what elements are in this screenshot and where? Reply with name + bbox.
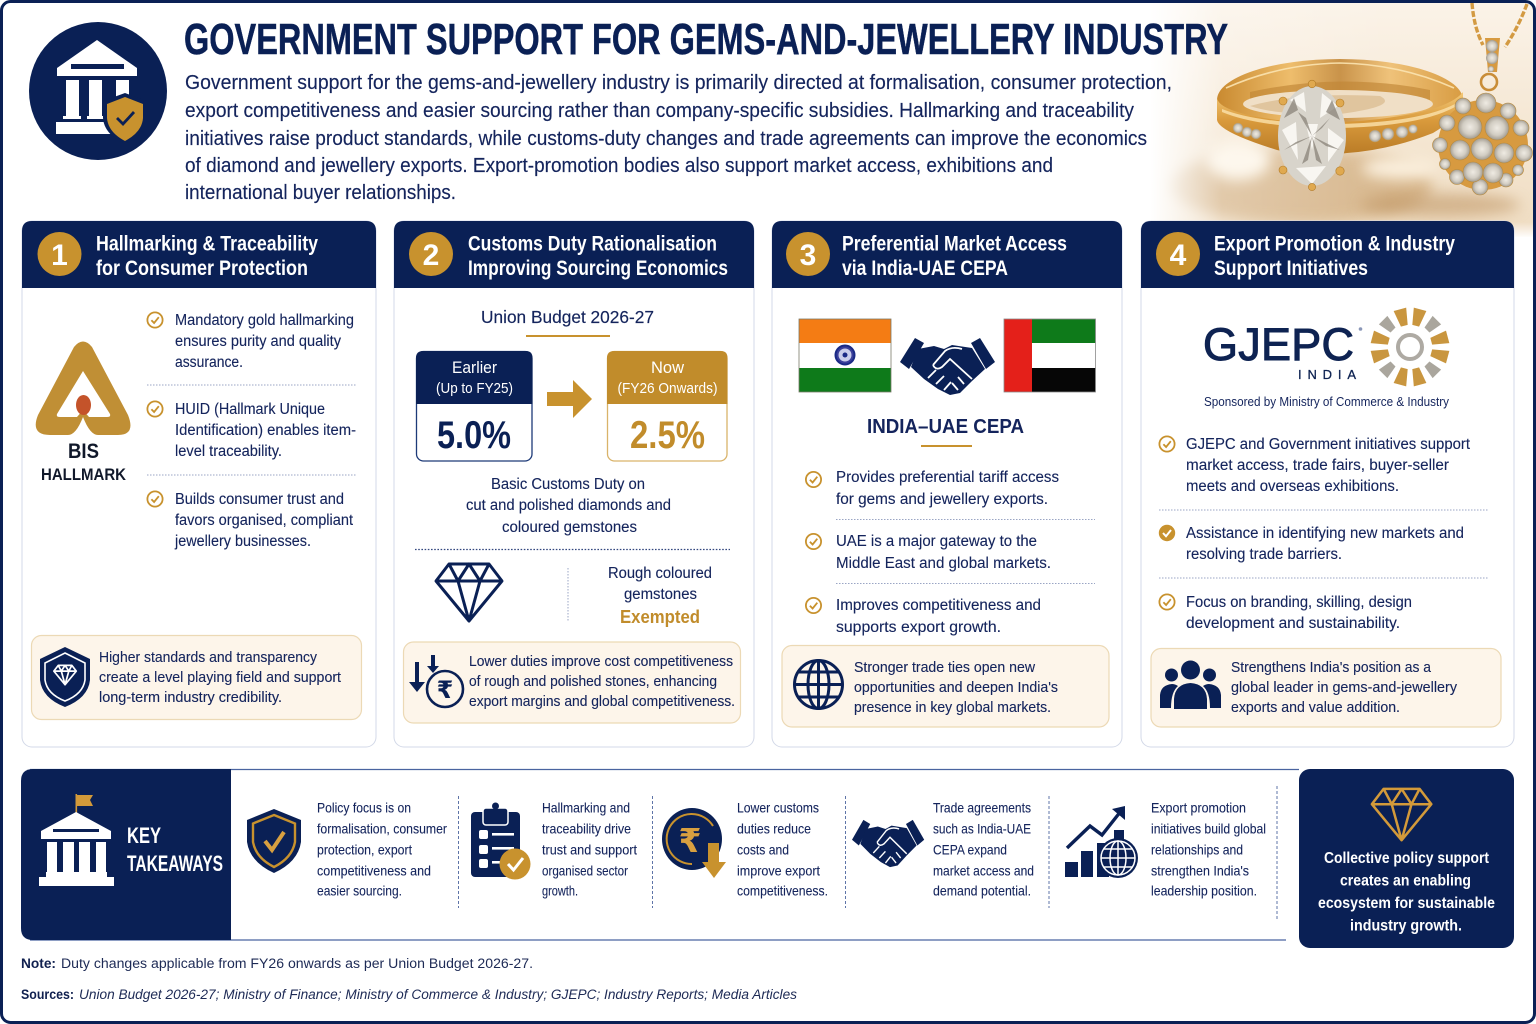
conclusion text	[1318, 850, 1495, 934]
text: rough gemstones exempted	[608, 565, 712, 627]
callout: higher standards: long-term industry credibility.	[99, 690, 282, 706]
intro paragraph: of diamond and jewellery exports. Export-promotion bodies also support market access, exhibitions and	[185, 155, 1053, 177]
bullet: GJEPC initiatives	[1159, 436, 1471, 495]
bullet: HUID: HUID (Hallmark Unique	[175, 401, 325, 418]
takeaway 3: lower customs duties: duties reduce	[737, 820, 811, 836]
takeaway 1: policy focus: formalisation, consumer	[317, 820, 447, 836]
text: basic customs duty: cut and polished diamonds and	[466, 497, 671, 514]
takeaway 4: trade agreements: such as India-UAE	[933, 820, 1031, 836]
text: basic customs duty: coloured gemstones	[502, 519, 637, 536]
arrow: earlier to now	[547, 380, 592, 418]
panel 1 header: Hallmarking & Traceability	[96, 232, 318, 256]
panel 4 header: Export Promotion & Industry	[1214, 232, 1455, 256]
intro paragraph	[185, 72, 1172, 204]
callout: stronger trade ties: opportunities and deepen India's	[854, 680, 1058, 696]
CEPA heading: INDIA–UAE CEPA	[867, 416, 1024, 438]
icon: gold diamond	[1372, 789, 1431, 840]
callout: global leader: global leader in gems-and-jewellery	[1231, 680, 1458, 696]
panel: 3 preferential market access	[772, 221, 1122, 747]
box: current duty 2.5%: 2.5%	[630, 414, 705, 457]
callout: stronger trade ties	[782, 646, 1109, 727]
panel 1 header	[22, 221, 376, 288]
logo: GJEPC India: Sponsored by Ministry of Commerce & Industry	[1204, 395, 1450, 409]
callout: lower duties: Lower duties improve cost competitiveness	[469, 654, 733, 670]
text: basic customs duty: Basic Customs Duty on	[491, 476, 645, 493]
panel 2 header	[394, 221, 754, 288]
takeaway 5: export promotion: Export promotion	[1151, 800, 1246, 816]
box: earlier duty 5.0%: Earlier	[452, 358, 497, 377]
conclusion text: industry growth.	[1350, 918, 1462, 934]
note: Note:	[21, 956, 56, 971]
bullet: mandatory hallmarking: ensures purity and quality	[175, 333, 341, 350]
key takeaways label with building icon: TAKEAWAYS	[127, 851, 223, 876]
bullet: HUID	[147, 401, 356, 460]
takeaway 3: lower customs duties: ₹	[679, 821, 701, 860]
bullet: GJEPC initiatives: market access, trade fairs, buyer-seller	[1186, 457, 1449, 474]
callout: higher standards	[32, 636, 362, 720]
callout: global leader: Strengthens India's position as a	[1231, 660, 1432, 676]
icon: UAE flag	[1004, 319, 1096, 392]
header icon: government building with shield	[29, 22, 167, 160]
panel 4 header: Support Initiatives	[1214, 257, 1368, 280]
bullet: consumer trust: jewellery businesses.	[174, 533, 311, 550]
box: earlier duty 5.0%	[416, 351, 532, 461]
intro paragraph: initiatives raise product standards, while customs-duty changes and trade agreements can improve the economics	[185, 128, 1147, 150]
takeaway 4: trade agreements: CEPA expand	[933, 842, 1007, 858]
takeaway 3: lower customs duties	[662, 800, 828, 898]
callout: stronger trade ties: Stronger trade ties open new	[854, 660, 1036, 676]
bullet: mandatory hallmarking: assurance.	[175, 354, 243, 371]
hero photo: gold ring and diamond pendant	[1150, 3, 1533, 238]
takeaway 3: lower customs duties: competitiveness.	[737, 882, 828, 898]
callout: lower duties: of rough and polished stones, enhancing	[469, 674, 717, 690]
bullet: mandatory hallmarking: Mandatory gold hallmarking	[175, 312, 354, 329]
bullet: UAE gateway: Middle East and global markets.	[836, 555, 1051, 572]
bullet: consumer trust: favors organised, compliant	[175, 512, 354, 529]
text: rough gemstones exempted: Rough coloured	[608, 565, 712, 582]
bullet: tariff access	[806, 469, 1059, 508]
takeaway 4: trade agreements: Trade agreements	[933, 800, 1031, 816]
icon: India flag	[799, 319, 891, 392]
callout: lower duties: export margins and global competitiveness.	[469, 694, 735, 710]
takeaway 1: policy focus	[247, 800, 447, 898]
icon: BIS hallmark logo: HALLMARK	[41, 466, 126, 484]
logo: GJEPC India	[1203, 308, 1450, 409]
panel: 1 hallmarking and traceability	[22, 221, 376, 747]
takeaway 5: export promotion: relationships and	[1151, 842, 1243, 858]
panel 3 header: Preferential Market Access	[842, 232, 1067, 256]
panel 2 header: Improving Sourcing Economics	[468, 257, 728, 280]
panel 4 header	[1141, 221, 1514, 288]
icon: BIS hallmark logo: BIS	[68, 440, 99, 463]
intro paragraph: Government support for the gems-and-jewellery industry is primarily directed at formalisation, consumer protection,	[185, 72, 1172, 94]
panel 2 header: 2	[423, 239, 439, 272]
text: basic customs duty	[466, 476, 671, 536]
bullet: mandatory hallmarking	[147, 312, 354, 371]
icon: diamond	[436, 564, 502, 621]
bullet: new markets: Assistance in identifying new markets and	[1186, 525, 1464, 542]
bullet: GJEPC initiatives: GJEPC and Government initiatives support	[1186, 436, 1471, 453]
takeaway 2: hallmarking trust: Hallmarking and	[542, 800, 630, 816]
takeaway 3: lower customs duties: costs and	[737, 842, 789, 858]
takeaway 4: trade agreements: demand potential.	[933, 882, 1031, 898]
bullet: branding and skilling: Focus on branding, skilling, design	[1186, 594, 1412, 611]
text: rough gemstones exempted: Exempted	[620, 607, 700, 627]
icon: handshake	[900, 338, 995, 395]
bullet: consumer trust	[147, 491, 354, 550]
takeaway 1: policy focus: protection, export	[317, 842, 412, 858]
text: rough gemstones exempted: gemstones	[624, 586, 697, 603]
bullet: tariff access: for gems and jewellery exports.	[836, 491, 1048, 508]
bullet: consumer trust: Builds consumer trust and	[175, 491, 344, 508]
sources: Union Budget 2026-27; Ministry of Finance; Ministry of Commerce & Industry; GJEPC; Industry Reports; Media Articles	[79, 987, 797, 1002]
panel: 2 customs duty rationalisation	[394, 221, 754, 747]
panel: 4 export promotion	[1141, 221, 1514, 747]
bullet: competitiveness: supports export growth.	[836, 619, 1001, 636]
box: current duty 2.5%	[607, 351, 728, 461]
takeaway 5: export promotion: strengthen India's	[1151, 862, 1249, 878]
intro paragraph: international buyer relationships.	[185, 182, 456, 204]
bullet: UAE gateway: UAE is a major gateway to the	[836, 533, 1037, 550]
takeaway 2: hallmarking trust: traceability drive	[542, 820, 631, 836]
bullet: tariff access: Provides preferential tariff access	[836, 469, 1059, 486]
panel 2 header: Customs Duty Rationalisation	[468, 232, 717, 256]
callout: higher standards: create a level playing field and support	[99, 670, 341, 686]
bullet: GJEPC initiatives: meets and overseas exhibitions.	[1186, 478, 1399, 495]
takeaway 2: hallmarking trust	[471, 800, 637, 898]
panel 1 header: 1	[51, 239, 68, 272]
takeaway 5: export promotion: initiatives build global	[1151, 820, 1266, 836]
conclusion text: ecosystem for sustainable	[1318, 895, 1495, 912]
bullet: competitiveness: Improves competitiveness and	[836, 597, 1041, 614]
takeaway 4: trade agreements: market access and	[933, 862, 1034, 878]
takeaway 3: lower customs duties: improve export	[737, 862, 820, 878]
box: current duty 2.5%: Now	[651, 358, 685, 377]
box: current duty 2.5%: (FY26 Onwards)	[618, 380, 718, 397]
takeaway 2: hallmarking trust: organised sector	[542, 862, 628, 878]
panel 4 header: 4	[1170, 239, 1187, 272]
bullet: competitiveness	[806, 597, 1041, 636]
panel: key takeaways strip	[21, 769, 1299, 940]
bullet: branding and skilling	[1159, 594, 1412, 632]
takeaway 3: lower customs duties: Lower customs	[737, 800, 819, 816]
bullet: HUID: level traceability.	[175, 443, 282, 460]
conclusion text: Collective policy support	[1324, 850, 1489, 867]
callout: lower duties	[404, 642, 740, 723]
note: Duty changes applicable from FY26 onwards as per Union Budget 2026-27.	[61, 956, 533, 971]
panel 3 header: 3	[800, 239, 816, 272]
takeaway 5: export promotion: leadership position.	[1151, 882, 1257, 898]
callout: global leader	[1151, 648, 1501, 727]
panel 3 header	[772, 221, 1122, 288]
callout: global leader: exports and value addition.	[1231, 700, 1400, 716]
panel 3 header: via India-UAE CEPA	[842, 257, 1008, 280]
bullet: branding and skilling: development and sustainability.	[1186, 615, 1400, 632]
box: earlier duty 5.0%: (Up to FY25)	[436, 380, 513, 397]
logo: GJEPC India: GJEPC	[1203, 319, 1354, 370]
panel 1 header: for Consumer Protection	[96, 257, 308, 280]
conclusion text: creates an enabling	[1340, 872, 1471, 890]
takeaway 5: export promotion	[1065, 800, 1266, 898]
takeaway 1: policy focus: Policy focus is on	[317, 800, 411, 816]
takeaway 1: policy focus: easier sourcing.	[317, 882, 402, 898]
callout: higher standards: Higher standards and transparency	[99, 650, 318, 666]
intro paragraph: export competitiveness and easier sourcing rather than company-specific subsidies. Hallmarking and traceability	[185, 100, 1134, 122]
takeaway 2: hallmarking trust: trust and support	[542, 842, 637, 858]
logo: GJEPC India: INDIA	[1298, 367, 1356, 382]
bullet: HUID: Identification) enables item-	[175, 422, 356, 439]
callout: stronger trade ties: presence in key global markets.	[854, 700, 1051, 716]
callout: lower duties: ₹	[437, 676, 453, 704]
takeaway 4: trade agreements	[852, 800, 1034, 898]
key takeaways label with building icon	[21, 769, 231, 940]
icon: BIS hallmark logo	[36, 342, 130, 484]
box: earlier duty 5.0%: 5.0%	[437, 414, 511, 457]
budget heading: Union Budget 2026-27	[481, 307, 654, 327]
takeaway 2: hallmarking trust: growth.	[542, 882, 578, 898]
key takeaways label with building icon: KEY	[127, 823, 161, 848]
bullet: UAE gateway	[806, 533, 1051, 572]
panel: collective policy support	[1299, 769, 1514, 948]
sources: Sources:	[21, 987, 74, 1002]
bullet: new markets: resolving trade barriers.	[1186, 546, 1342, 563]
bullet: new markets	[1159, 525, 1464, 563]
takeaway 1: policy focus: competitiveness and	[317, 862, 431, 878]
